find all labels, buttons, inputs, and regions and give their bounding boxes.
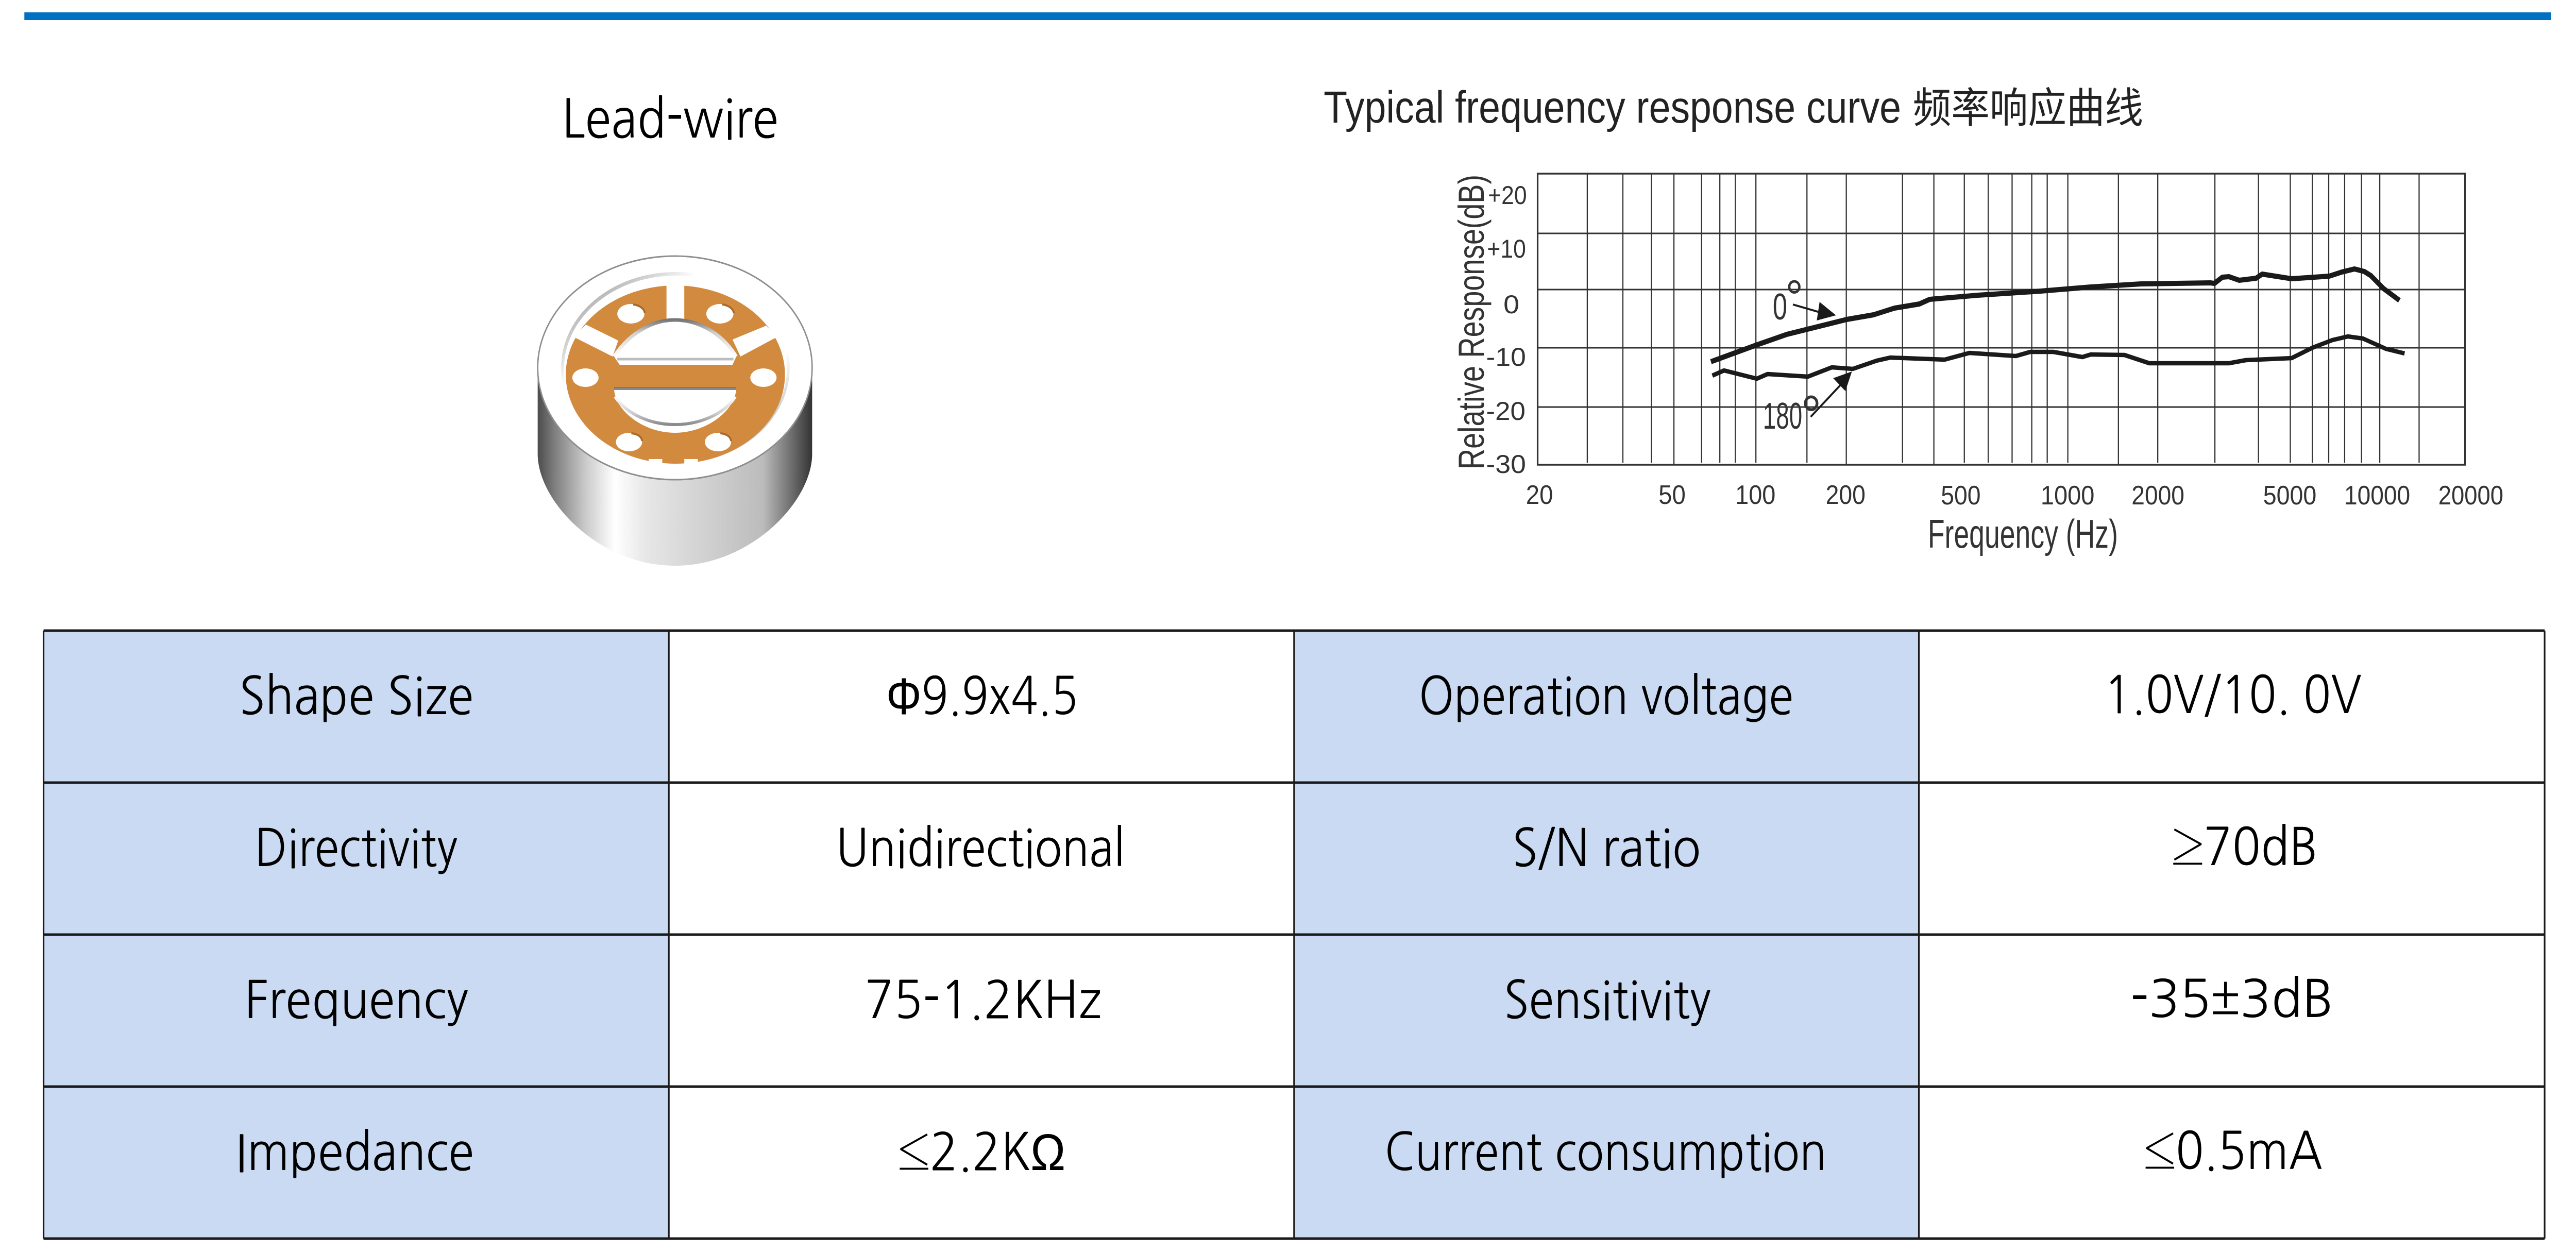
y axis tick labels: +10 [1487,235,1526,264]
row: impedance and current consumption: Current consumption [1384,1126,1826,1178]
x axis tick labels [1526,480,2503,511]
y axis tick labels [1486,181,1527,479]
y axis title: Relative Response(dB) [1451,175,1492,469]
capsule top rim [538,256,812,480]
row: frequency and sensitivity [245,973,2333,1026]
x axis tick labels: 20 [1526,480,1553,510]
arrow: 180 degree callout [1811,371,1852,417]
copper board [566,281,785,464]
row: impedance and current consumption: ≤0.5mA [2144,1125,2323,1177]
upper window [614,320,736,365]
row: shape size and operation voltage: Φ9.9x4.5 [886,668,1078,725]
row: shape size and operation voltage: Operation voltage [1419,670,1793,722]
curve: 180 degrees [1713,336,2404,379]
specification table [44,631,2545,1239]
label cell backgrounds [44,631,1919,1239]
row: impedance and current consumption: Impedance [235,1126,474,1178]
row: directivity and S/N ratio: S/N ratio [1512,822,1701,874]
board slots [667,285,684,319]
row: shape size and operation voltage [240,668,2362,725]
icon: microphone capsule [538,256,812,566]
x axis tick labels: 10000 [2344,480,2410,511]
y axis tick labels: -30 [1486,450,1526,479]
label: 180 degrees: 180 [1763,395,1802,437]
heading: Lead-wire: Lead-wire [562,92,778,146]
x axis tick labels: 500 [1941,480,1981,511]
label: 0 degrees: 0 [1773,286,1787,328]
row: impedance and current consumption [235,1124,2323,1181]
top blue rule [24,12,2551,20]
x axis tick labels: 1000 [2041,480,2094,511]
x axis tick labels: 100 [1735,480,1775,510]
row: directivity and S/N ratio: Directivity [255,822,457,874]
chart heading: Typical frequency response curve [1324,82,1901,132]
label: 180 degrees: ° [1801,384,1821,447]
row: frequency and sensitivity: Frequency [245,974,468,1026]
row: directivity and S/N ratio: ≥70dB [2172,821,2318,873]
x axis tick labels: 50 [1658,480,1686,510]
curve: 0 degrees [1711,269,2399,362]
label: 180 degrees [1763,384,1821,447]
row: frequency and sensitivity: Sensitivity [1504,974,1711,1026]
x axis tick labels: 2000 [2131,480,2184,511]
y axis tick labels: 0 [1503,291,1519,319]
row: shape size and operation voltage: Shape Size [240,670,473,722]
capsule body [538,368,812,566]
x axis tick labels: 200 [1826,480,1866,510]
row: frequency and sensitivity: 75-1.2KHz [865,974,1101,1026]
row: frequency and sensitivity: -35±3dB [2130,973,2333,1025]
row: impedance and current consumption: ≤2.2KΩ [899,1124,1065,1181]
lower window [614,387,736,433]
chart heading: 频率响应曲线 [1913,86,2143,132]
frequency response chart [1451,174,2503,556]
hole shading [631,304,734,441]
x axis tick labels: 20000 [2438,480,2503,511]
row: shape size and operation voltage: 1.0V/10. 0V [2104,669,2362,721]
label: 0 degrees [1773,270,1803,328]
y axis tick labels: -20 [1486,397,1526,426]
arrow: 0 degree callout [1793,302,1836,320]
y axis tick labels: -10 [1486,343,1526,372]
recessed groove [561,272,790,464]
y axis tick labels: +20 [1488,181,1527,210]
mounting holes [617,304,645,324]
x axis title: Frequency (Hz) [1928,512,2118,556]
label: 0 degrees: ° [1785,270,1803,325]
row: directivity and S/N ratio [255,821,2318,874]
row: directivity and S/N ratio: Unidirectional [836,822,1125,874]
bottom pads [649,459,662,464]
x axis tick labels: 5000 [2263,480,2316,511]
